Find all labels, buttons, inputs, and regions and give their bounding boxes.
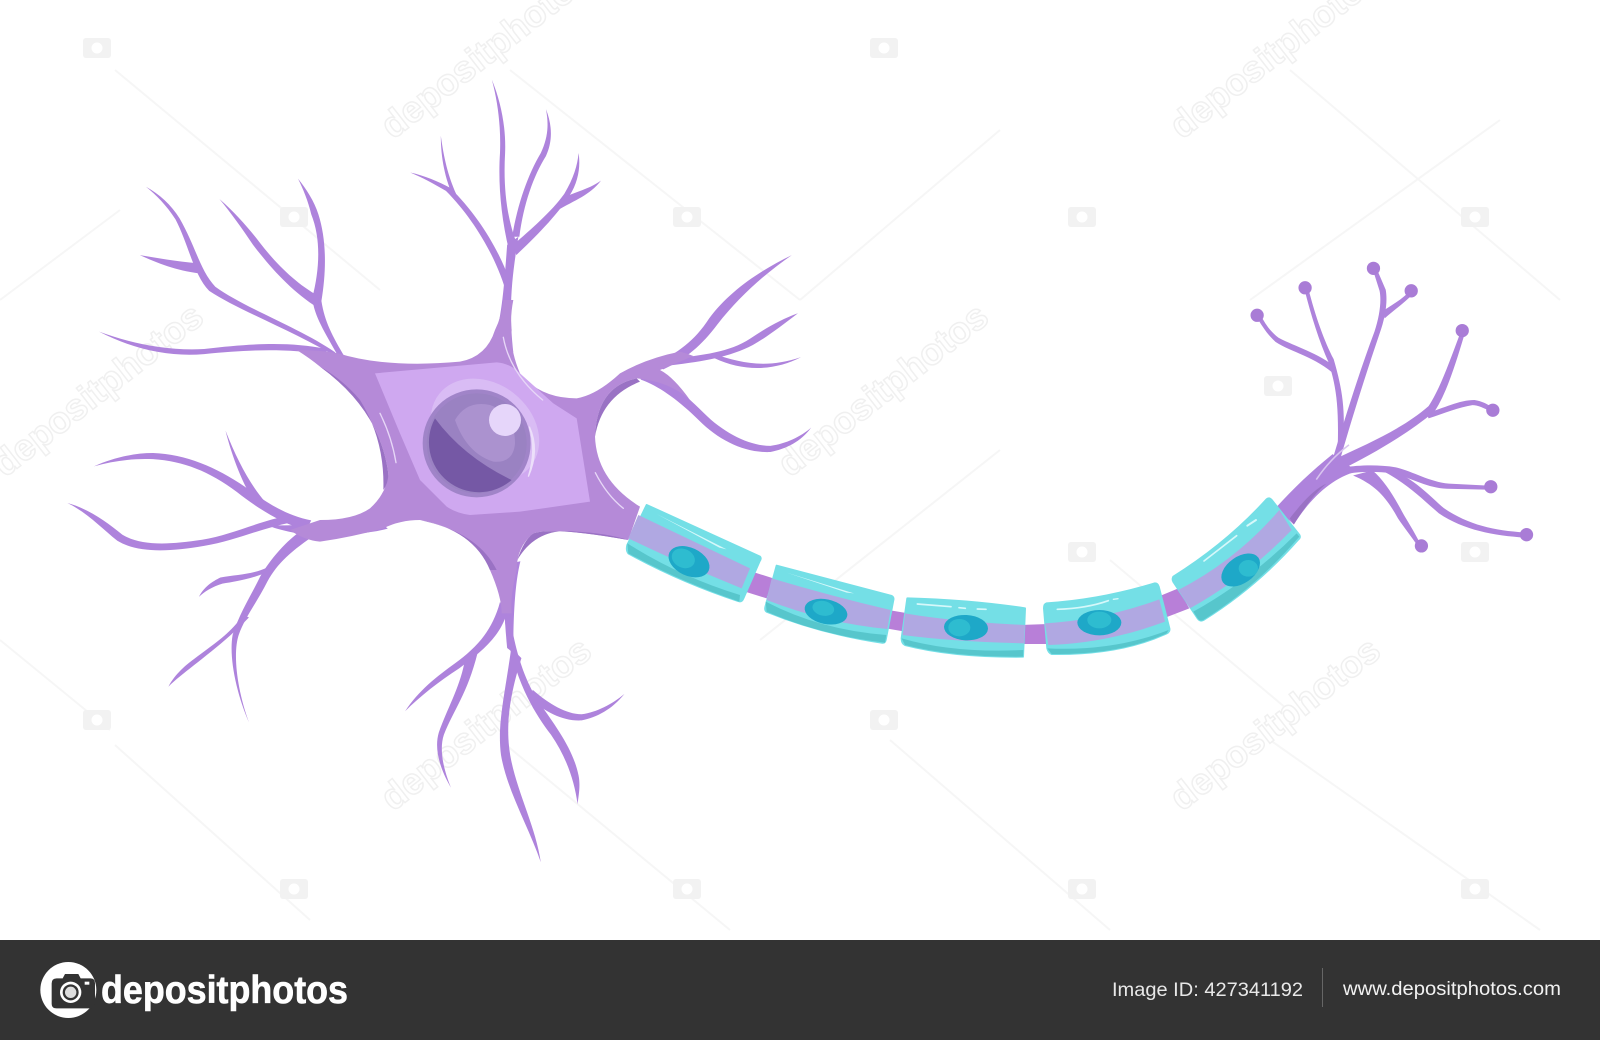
logo icon: camera [40,962,96,1018]
logo wordmark: depositphotos [101,969,348,1012]
dendrite group: bottom [405,561,624,862]
myelin segment 2 [765,566,893,643]
watermark layer: depositphotos [1162,629,1388,818]
soma shadows [320,367,640,570]
watermark layer: depositphotos [373,629,599,818]
divider [1322,968,1323,1007]
myelin sheath segments [627,498,1300,657]
nucleus [423,389,534,497]
dendrite group: upper left [99,179,345,360]
watermark layer: depositphotos [770,295,996,484]
image id: Image ID: 427341192 [1112,979,1303,1001]
nucleus halo [410,357,560,503]
myelin segment 3 [902,598,1025,657]
soma outline [290,300,693,613]
axon connector segments [745,570,1189,644]
dendrite group: right [638,255,811,452]
axon terminal knobs [1251,262,1533,553]
soma highlights [380,337,623,508]
footer banner [0,940,1600,1040]
dendrite group: top [410,80,601,352]
axon terminal branches [1256,268,1527,547]
myelin segment 4 [1044,583,1169,654]
cell body (soma) [290,300,693,613]
soma light area [375,362,590,515]
website url: www.depositphotos.com [1342,978,1561,1000]
neuron dendrites [67,80,1533,862]
dendrite group: lower left [67,431,388,722]
myelin segment 1 [627,505,761,602]
myelin segment 5 [1173,498,1300,621]
